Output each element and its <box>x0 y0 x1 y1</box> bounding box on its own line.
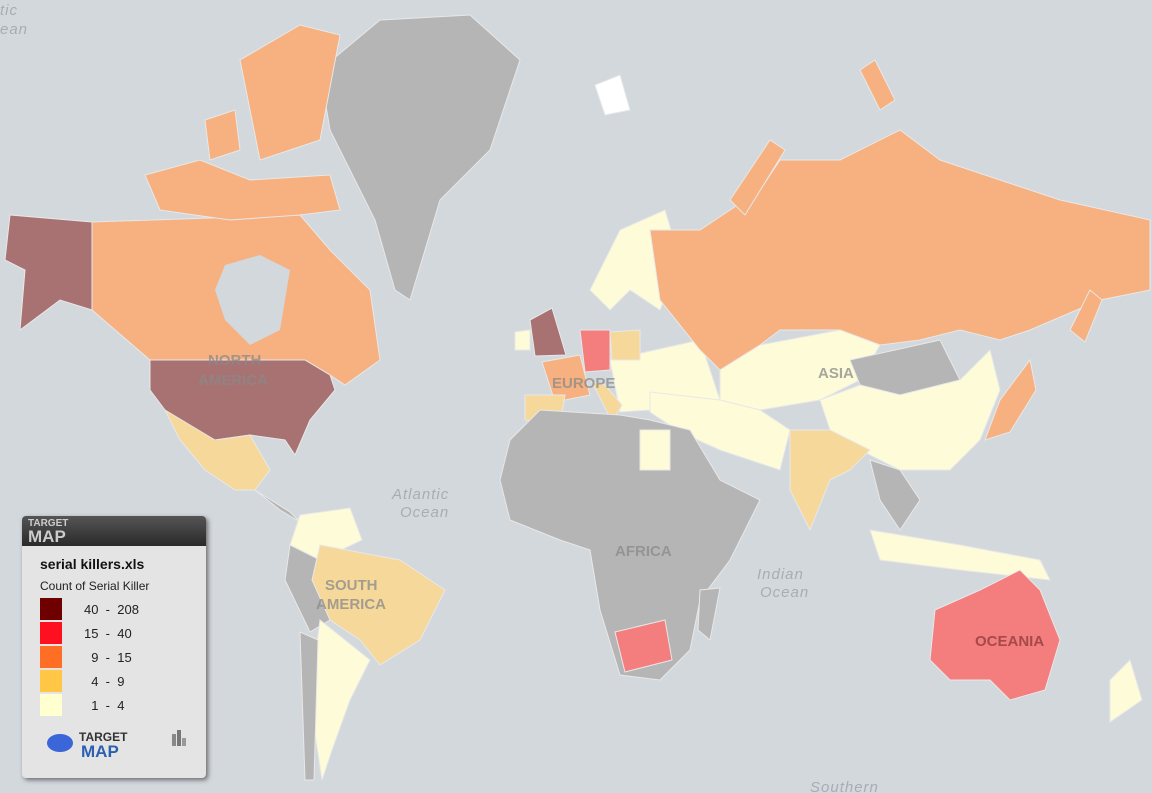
europe <box>590 210 680 310</box>
ocean labels: Indian <box>757 566 804 583</box>
legend subtitle: Count of Serial Killer <box>40 579 149 593</box>
oceania <box>930 570 1060 700</box>
targetmap logo: MAP <box>81 742 119 761</box>
country: mexico <box>165 410 270 490</box>
continent labels <box>198 352 1044 650</box>
targetmap logo: TARGET <box>79 730 127 744</box>
country: canada <box>92 25 380 385</box>
africa <box>500 410 760 680</box>
continent labels: NORTH <box>208 352 261 369</box>
ocean labels: Ocean <box>400 504 449 521</box>
hudson bay <box>215 255 290 345</box>
legend title: serial killers.xls <box>40 556 144 572</box>
ocean labels: ean <box>0 21 28 38</box>
legend panel <box>22 516 206 778</box>
russia <box>650 130 1150 370</box>
icon: bar chart <box>172 730 186 746</box>
legend panel: TARGET <box>28 518 68 529</box>
continent labels: SOUTH <box>325 577 378 594</box>
ocean labels: Atlantic <box>391 486 449 503</box>
continent labels: AMERICA <box>316 596 386 613</box>
asia <box>720 330 880 410</box>
targetmap logo <box>47 730 128 761</box>
ocean labels: tic <box>0 2 18 19</box>
ocean labels <box>0 2 879 793</box>
legend rows: 15 - 40 <box>84 626 132 641</box>
legend rows: 1 - 4 <box>91 698 124 713</box>
continent labels: AFRICA <box>615 543 672 560</box>
ocean labels: Ocean <box>760 584 809 601</box>
legend rows: 9 - 15 <box>91 650 132 665</box>
continent labels: ASIA <box>818 365 854 382</box>
legend rows: 40 - 208 <box>84 602 139 617</box>
legend panel: MAP <box>28 527 66 546</box>
continent labels: AMERICA <box>198 372 268 389</box>
legend rows <box>40 598 139 716</box>
legend rows: 4 - 9 <box>91 674 124 689</box>
continent labels: OCEANIA <box>975 633 1044 650</box>
continent labels: EUROPE <box>552 375 615 392</box>
south america <box>290 508 362 560</box>
country: usa + alaska <box>5 215 335 455</box>
country: greenland <box>320 15 520 300</box>
